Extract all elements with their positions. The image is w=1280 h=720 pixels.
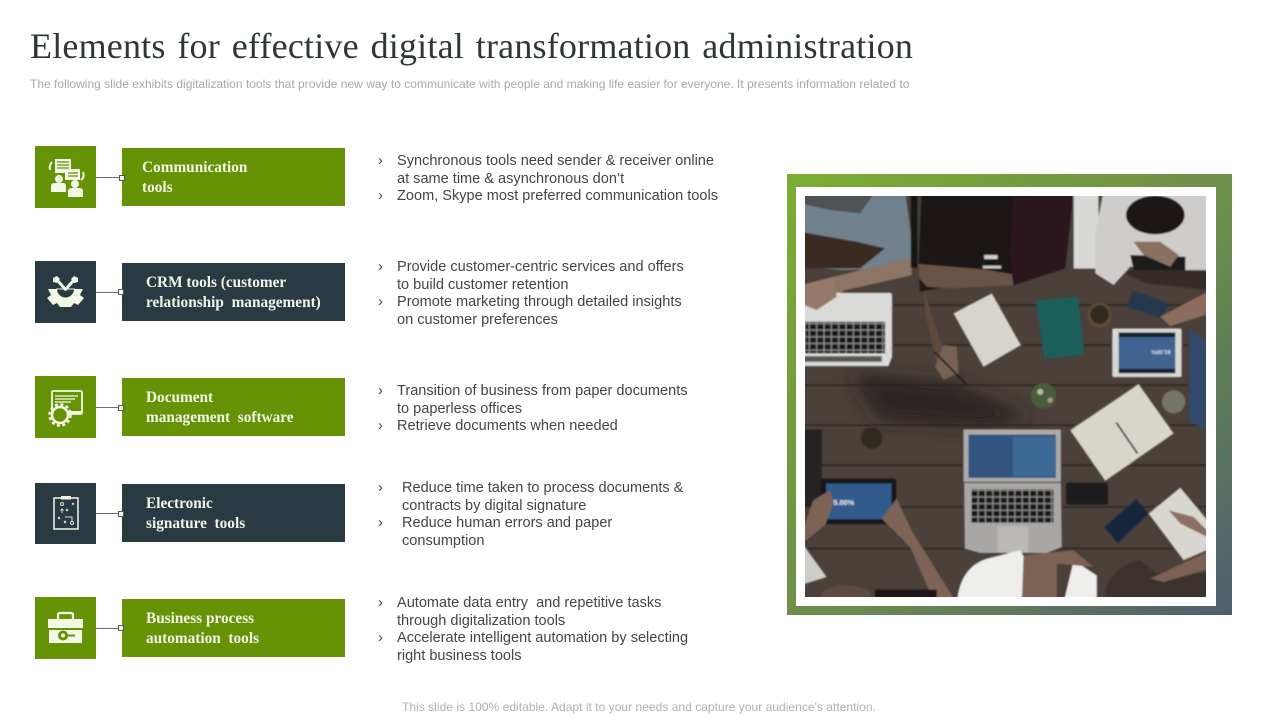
phone lower right bbox=[1104, 499, 1149, 543]
label: CRM tools bbox=[122, 263, 345, 321]
left dark item bbox=[800, 430, 822, 506]
top middle person bbox=[918, 190, 1074, 292]
title: Elements for effective digital transformation administration bbox=[30, 26, 913, 66]
icon: clipboard bbox=[35, 483, 96, 544]
connector node bbox=[118, 289, 124, 295]
bottom left paper bbox=[800, 540, 827, 585]
icon: document gear bbox=[35, 376, 96, 438]
photo: team at wooden table bbox=[805, 196, 1206, 597]
connector bbox=[96, 513, 122, 514]
bullet text: › bbox=[378, 188, 383, 204]
bullet text: Reduce time taken to process documents & contracts by digital signature bbox=[402, 480, 683, 514]
bullet text bbox=[378, 383, 688, 434]
connector node bbox=[118, 405, 124, 411]
label: business process automation tools bbox=[122, 599, 345, 657]
center laptop bbox=[963, 430, 1061, 482]
bullet text: Synchronous tools need sender & receiver online at same time & asynchronous don’t bbox=[397, 153, 714, 187]
row 4: electronic signature tools bbox=[35, 480, 684, 549]
footer note: This slide is 100% editable. Adapt it to your needs and capture your audience's attention. bbox=[402, 700, 876, 714]
bullet text: › bbox=[378, 515, 383, 531]
connector bbox=[96, 628, 122, 629]
label: electronic signature tools bbox=[122, 484, 345, 542]
connector node bbox=[118, 625, 124, 631]
top right person bbox=[1095, 190, 1210, 285]
label: business process automation tools: Business process automation tools bbox=[146, 610, 259, 647]
small plant bbox=[861, 427, 882, 449]
bullet text: › bbox=[378, 480, 383, 496]
row 2: CRM tools bbox=[35, 259, 684, 328]
spiral notebook bbox=[1149, 488, 1210, 560]
bullet text: Provide customer-centric services and offers to build customer retention bbox=[397, 259, 684, 293]
connector bbox=[96, 177, 122, 178]
bullet text bbox=[378, 259, 684, 328]
photo: team at wooden table: 55.00% bbox=[829, 498, 855, 507]
label: CRM tools: CRM tools (customer relationship management) bbox=[146, 274, 321, 311]
bullet text: › bbox=[378, 259, 383, 275]
open notebook bbox=[1070, 384, 1174, 481]
bullet text: › bbox=[378, 383, 383, 399]
bullet text: Zoom, Skype most preferred communication tools bbox=[397, 188, 718, 204]
row 1: communication tools bbox=[35, 146, 718, 208]
framed photo bbox=[787, 174, 1232, 615]
connector bbox=[96, 292, 122, 293]
dark phone bbox=[1066, 483, 1108, 505]
icon: wrench and gear bbox=[35, 261, 96, 323]
label: document management software: Document management software bbox=[146, 389, 294, 426]
table plank lines bbox=[800, 305, 1210, 549]
left laptop bbox=[800, 293, 892, 366]
notebook white bbox=[953, 293, 1021, 367]
glass object bbox=[1162, 390, 1185, 414]
photo: team at wooden table: 81.00% bbox=[1151, 348, 1171, 354]
table shadow bbox=[850, 373, 1034, 427]
top left person bbox=[800, 190, 913, 270]
label: electronic signature tools: Electronic signature tools bbox=[146, 495, 245, 532]
label: communication tools bbox=[122, 148, 345, 206]
bullet text: › bbox=[378, 595, 383, 611]
bottom people bbox=[957, 550, 1030, 602]
bullet text bbox=[378, 153, 718, 204]
bullet text: Retrieve documents when needed bbox=[397, 418, 618, 434]
connector bbox=[96, 407, 122, 408]
label: communication tools: Communication tools bbox=[142, 159, 247, 196]
icon: toolbox bbox=[35, 597, 96, 659]
bullet text: › bbox=[378, 630, 383, 646]
subtitle: The following slide exhibits digitalization tools that provide new way to communicate with people and making life easier for everyone. It presents information related to bbox=[30, 77, 910, 91]
phone top right bbox=[1127, 290, 1169, 318]
right edge laptop bbox=[1189, 328, 1210, 434]
pen hand bbox=[935, 345, 958, 379]
bullet text: › bbox=[378, 294, 383, 310]
tablet left bbox=[821, 479, 896, 524]
connector node bbox=[119, 175, 125, 181]
bullet text bbox=[378, 480, 684, 549]
bullet text: Transition of business from paper documents to paperless offices bbox=[397, 383, 688, 417]
connector node bbox=[118, 511, 124, 517]
tablet right bbox=[1112, 328, 1182, 377]
bullet text: Automate data entry and repetitive tasks through digitalization tools bbox=[397, 595, 661, 629]
cup bbox=[1087, 303, 1112, 327]
bullet text: Promote marketing through detailed insights on customer preferences bbox=[397, 294, 682, 328]
bullet text: Reduce human errors and paper consumption bbox=[402, 515, 612, 549]
row 3: document management software bbox=[35, 376, 688, 438]
bullet text: Accelerate intelligent automation by selecting right business tools bbox=[397, 630, 688, 664]
green book bbox=[1036, 297, 1084, 359]
row 5: business process automation tools bbox=[35, 595, 688, 664]
plant bbox=[1031, 383, 1056, 409]
bullet text: › bbox=[378, 418, 383, 434]
bullet text bbox=[378, 595, 688, 664]
label: document management software bbox=[122, 378, 345, 436]
icon: communication bbox=[35, 146, 96, 208]
bullet text: › bbox=[378, 153, 383, 169]
